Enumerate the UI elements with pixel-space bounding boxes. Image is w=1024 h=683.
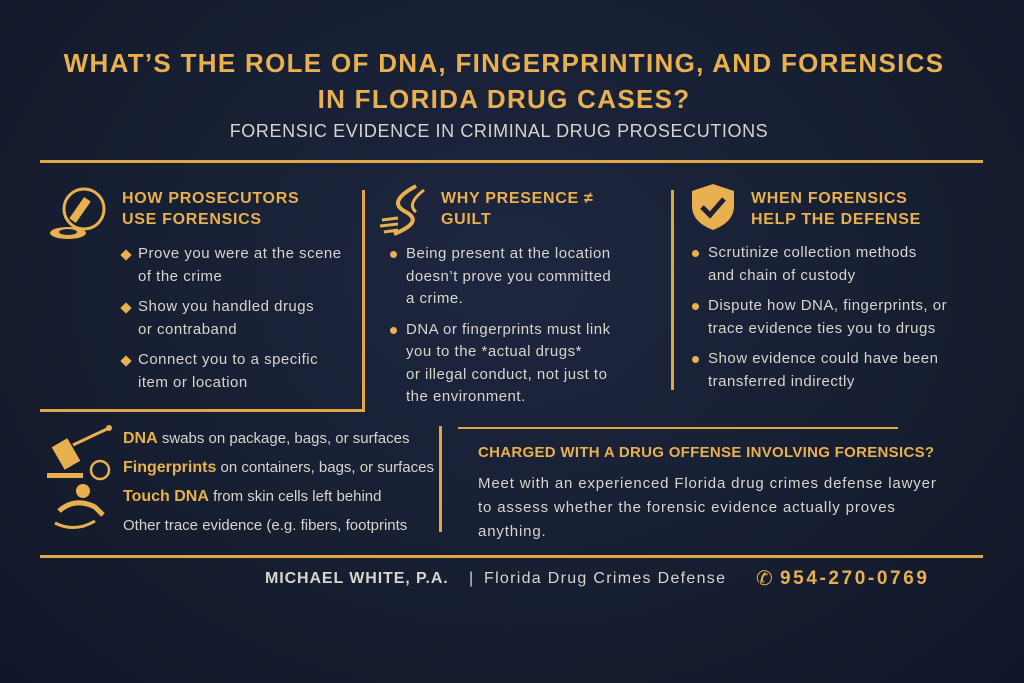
heading: WHY PRESENCE ≠ xyxy=(441,190,594,207)
callout: charged: to assess whether the forensic evidence actually proves xyxy=(478,499,896,516)
heading: HOW PROSECUTORS xyxy=(122,190,299,207)
bullets: the environment. xyxy=(406,388,526,405)
text lines: DNA swabs on package, bags, or surfaces xyxy=(123,430,409,447)
heading: GUILT xyxy=(441,211,491,228)
title: IN FLORIDA DRUG CASES? xyxy=(318,84,690,114)
bullets: DNA or fingerprints must link xyxy=(406,320,611,338)
bullets: or illegal conduct, not just to xyxy=(406,366,607,382)
bullets: and chain of custody xyxy=(708,266,856,284)
bullets: of the crime xyxy=(138,268,222,284)
panel: prosecutors xyxy=(50,188,342,390)
bullets: Dispute how DNA, fingerprints, or xyxy=(708,297,947,314)
footer: | xyxy=(469,570,473,587)
heading xyxy=(441,190,594,228)
bullets: Show you handled drugs xyxy=(138,298,314,315)
bullets: you to the *actual drugs* xyxy=(406,343,582,360)
bullets: a crime. xyxy=(406,290,463,307)
heading: USE FORENSICS xyxy=(122,211,262,228)
bullets xyxy=(120,245,342,390)
bullets: trace evidence ties you to drugs xyxy=(708,320,936,336)
panel: presence xyxy=(380,184,611,405)
bullets xyxy=(692,244,947,390)
icon: dna xyxy=(380,184,425,236)
footer: Florida Drug Crimes Defense xyxy=(484,570,726,587)
bullets: Prove you were at the scene xyxy=(138,245,342,262)
icon: microscope xyxy=(50,188,106,239)
callout: charged: Meet with an experienced Florida drug crimes defense lawyer xyxy=(478,475,937,492)
bullets: Connect you to a specific xyxy=(138,351,318,368)
footer: 954-270-0769 xyxy=(780,568,930,589)
callout: charged: CHARGED WITH A DRUG OFFENSE INVOLVING FORENSICS? xyxy=(478,444,934,461)
bullets: Scrutinize collection methods xyxy=(708,244,917,261)
title xyxy=(64,48,944,114)
icon: shield xyxy=(692,184,734,230)
heading xyxy=(122,190,299,228)
subtitle: FORENSIC EVIDENCE IN CRIMINAL DRUG PROSECUTIONS xyxy=(230,121,768,141)
text lines: Fingerprints on containers, bags, or surfaces xyxy=(123,459,434,476)
bullets xyxy=(390,245,611,405)
icon: phone: ✆ xyxy=(756,568,773,590)
footer: MICHAEL WHITE, P.A. xyxy=(265,570,449,587)
title: WHAT’S THE ROLE OF DNA, FINGERPRINTING, AND FORENSICS xyxy=(64,48,944,78)
bullets: item or location xyxy=(138,374,248,390)
text lines xyxy=(123,430,434,534)
bullets: Show evidence could have been xyxy=(708,350,938,367)
callout: charged xyxy=(478,444,937,540)
bullets: transferred indirectly xyxy=(708,372,855,390)
heading: HELP THE DEFENSE xyxy=(751,211,921,228)
bullets: Being present at the location xyxy=(406,245,611,262)
heading: WHEN FORENSICS xyxy=(751,190,907,207)
footer xyxy=(265,568,930,590)
callout: charged: anything. xyxy=(478,523,547,540)
evidence list xyxy=(47,425,434,534)
icon: lab tools xyxy=(47,425,112,529)
heading xyxy=(751,190,921,228)
text lines: Other trace evidence (e.g. fibers, footprints xyxy=(123,517,407,534)
text lines: Touch DNA from skin cells left behind xyxy=(123,488,382,505)
bullets: or contraband xyxy=(138,320,237,338)
bullets: doesn’t prove you committed xyxy=(406,268,611,284)
panel: defense xyxy=(692,184,947,390)
